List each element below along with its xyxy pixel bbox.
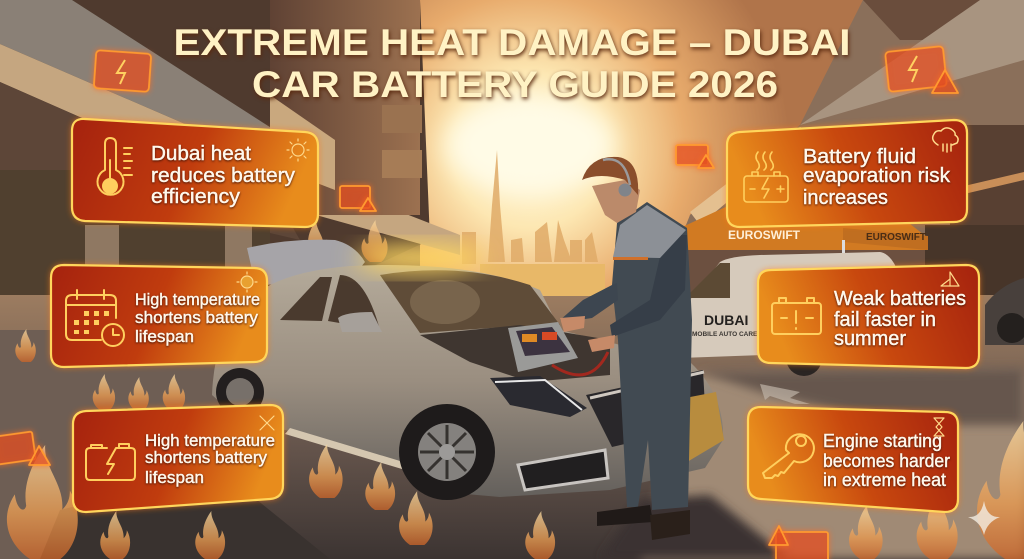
parked dark car [985,278,1024,345]
panel: fluid evaporation [727,120,967,227]
icon: warning battery [772,298,821,334]
title: CAR BATTERY GUIDE 2026 [252,64,778,105]
panel: heat reduces efficiency [72,119,318,227]
text: fluid: increases [803,187,888,209]
mini battery icon: top right [885,46,958,93]
panel: lifespan [51,265,267,367]
icon: warning triangle [941,272,959,286]
mechanic [560,157,692,540]
flames behind car [15,220,388,410]
panel: weak batteries [758,265,979,368]
battery diagnostic tool [508,322,608,375]
text: lifespan lower [145,432,275,487]
Euroswift canopy and van [680,205,928,376]
text: engine: Engine starting [823,431,942,451]
title: EXTREME HEAT DAMAGE – DUBAI [174,22,850,63]
text: fluid [803,146,951,209]
text: lifespan: shortens battery [135,309,259,327]
icon: sun [237,272,257,292]
roof glare [355,245,485,271]
mini battery icon: centre right [676,145,714,168]
text: lifespan lower: lifespan [145,469,204,487]
icon: thermometer [97,138,132,195]
icon: cracked battery [86,444,135,480]
text: weak: summer [834,328,906,350]
panel: lifespan lower [73,405,283,512]
sun glow [445,95,615,195]
Euroswift canopy and van: EUROSWIFT [866,232,926,243]
text: engine: becomes harder [823,451,950,471]
text: weak [834,288,966,350]
text: lifespan lower: shortens battery [145,449,268,467]
mini battery icon: centre left [340,186,376,211]
icon: cloud [933,128,958,152]
icon: hourglass [934,418,944,436]
icon: calendar [66,290,124,346]
Euroswift canopy and van: EUROSWIFT [728,228,801,242]
text: fluid: Battery fluid [803,146,916,168]
Euroswift canopy and van: MOBILE AUTO CARE [692,331,758,338]
sparkle mark [968,501,1000,535]
mini battery icon: top left [94,50,151,92]
Dubai skyline [462,150,598,264]
text: heat: Dubai heat [151,143,251,165]
title [174,22,850,105]
text: lifespan: lifespan [135,328,194,346]
icon: sun [287,139,309,161]
ground flames [7,421,1024,559]
silver sedan [212,240,724,500]
icon: key [763,434,814,478]
text: engine [823,431,950,490]
text: weak: Weak batteries [834,288,966,310]
mini battery icon: bottom right [769,526,828,559]
road arrow [760,384,810,404]
text: fluid: evaporation risk [803,165,951,187]
panel: engine starting [748,407,958,512]
icon: steaming battery [744,152,788,202]
text: lifespan [135,291,260,346]
icon: wrench [260,416,274,430]
text: engine: in extreme heat [823,470,946,490]
text: weak: fail faster in [834,309,936,331]
text: lifespan: High temperature [135,291,260,309]
text: lifespan lower: High temperature [145,432,275,450]
text: heat: reduces battery [151,165,295,187]
text: heat [151,143,295,208]
mini battery icon: lower left [0,431,50,465]
text: heat: efficiency [151,186,240,208]
Euroswift canopy and van: DUBAI [704,312,748,328]
